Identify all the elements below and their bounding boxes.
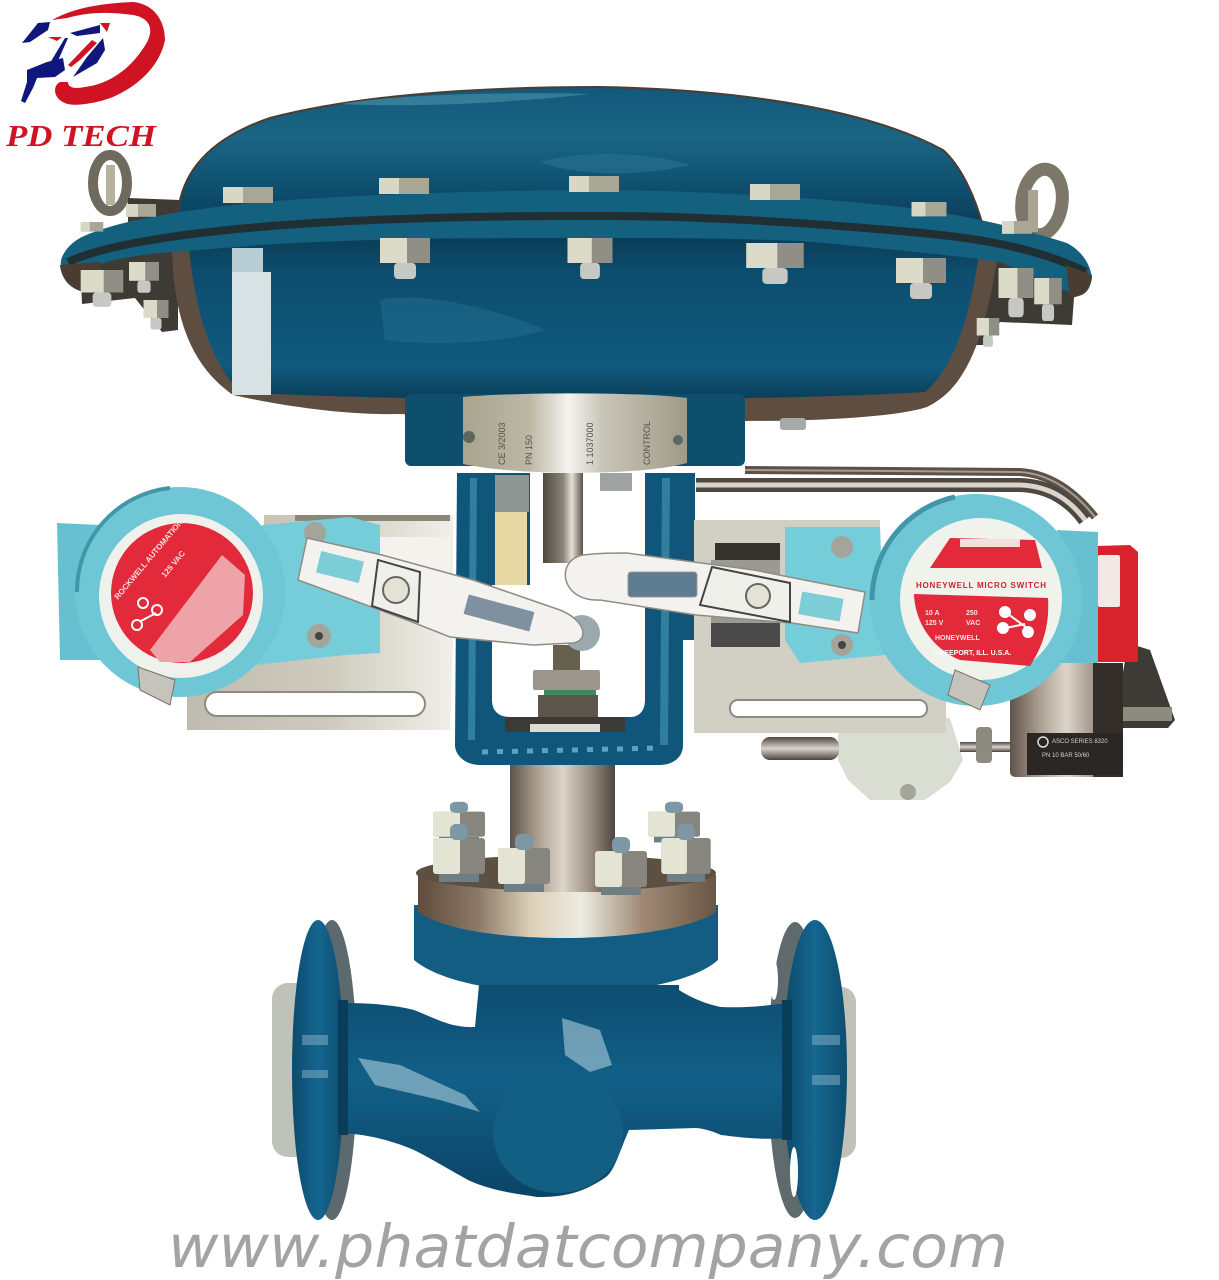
red label main: [914, 594, 1048, 666]
ring cover: [870, 494, 1082, 706]
screws: [304, 522, 331, 648]
label white stripe: [960, 539, 1020, 547]
logo wordmark: PD TECH: [5, 118, 157, 153]
label text: [925, 610, 1011, 657]
logo: PD Tech: [5, 2, 165, 153]
left mounting bracket: [187, 515, 453, 730]
yoke arms: [455, 473, 695, 765]
flange end shadows: [60, 262, 1092, 298]
logo mark: blue stylised letters: [21, 22, 105, 103]
valve body: [272, 920, 856, 1220]
right flange: [783, 920, 847, 1220]
upper dome: [178, 87, 984, 230]
steel ring side: [418, 875, 716, 938]
logo mark: red slash: [48, 23, 110, 67]
right lever arm: [565, 553, 865, 633]
plug boss: [493, 1073, 623, 1193]
lower casing highlights: [380, 297, 545, 343]
ring cover: [75, 487, 285, 697]
left switch housing: [57, 487, 380, 705]
nameplate text: CONTROL: [642, 421, 652, 465]
solenoid nameplate: [1027, 733, 1123, 775]
lifting eye left: [93, 155, 127, 211]
hex nut: [533, 670, 600, 690]
solenoid cylinder: [1010, 663, 1123, 777]
nameplate text: PN 150: [524, 435, 534, 465]
switch symbol: [132, 598, 162, 630]
actuator diaphragm casing: [60, 87, 1092, 421]
left lever arm: [298, 538, 600, 651]
right switch housing: [785, 494, 1098, 710]
solenoid nameplate: PN 10 BAR 50/60: [1042, 753, 1090, 759]
label heading: HONEYWELL MICRO SWITCH: [916, 581, 1046, 590]
steel ring top face: [416, 855, 716, 891]
label text: 250: [966, 610, 978, 617]
switch symbol: [998, 607, 1035, 637]
solenoid nameplate: ASCO SERIES 8320: [1052, 739, 1108, 745]
white face: [99, 514, 263, 678]
left flange: [292, 920, 344, 1220]
cast highlights: [302, 1018, 840, 1112]
lock washer: [505, 717, 625, 732]
flange dark stripe: [68, 216, 1086, 272]
collar casting: [405, 394, 745, 466]
red housing: [1097, 545, 1138, 662]
main body: [343, 985, 787, 1197]
nameplate text: CE 3/2003: [497, 422, 507, 465]
flange studs and nuts: [433, 802, 711, 895]
dark mounts behind flange bolts: [80, 198, 1076, 345]
ring shadow: [77, 488, 170, 592]
red label top: [930, 538, 1042, 568]
label text: 10 A: [925, 610, 940, 617]
label text: HONEYWELL: [935, 635, 980, 642]
lifting eye right: [1018, 167, 1066, 237]
white face: [900, 518, 1062, 680]
right flange face plate: [820, 987, 856, 1158]
solenoid assembly: [1010, 545, 1175, 777]
instrument tube: [696, 470, 1095, 520]
flange ring: [61, 190, 1092, 296]
red label: [111, 523, 253, 663]
cover clip: [948, 670, 990, 710]
white sleeve spacer: [232, 248, 271, 395]
conduit block: [785, 527, 885, 663]
threaded sleeve: [538, 695, 598, 722]
back plate: [57, 523, 100, 660]
valve bonnet: [414, 765, 718, 993]
label text: 125 VAC: [160, 549, 187, 579]
base speckles: [482, 748, 660, 752]
right mounting bracket: [694, 520, 946, 733]
label text: ROCKWELL AUTOMATION: [113, 518, 185, 601]
cover clip: [138, 667, 175, 705]
back plate: [1057, 530, 1098, 663]
dome highlights: [340, 93, 590, 105]
nameplate band: [463, 393, 687, 473]
flange necks: [338, 1000, 792, 1140]
scale label: [495, 475, 529, 585]
bonnet cylinder: [510, 765, 615, 892]
bolt holes: [770, 960, 798, 1197]
label text band: [150, 555, 245, 662]
bottom bolt nuts: [380, 238, 430, 279]
nameplate text: [497, 421, 652, 465]
green seal: [544, 690, 596, 695]
screws: [831, 536, 853, 656]
left flange rear rim: [307, 920, 357, 1220]
label text: VAC: [966, 620, 980, 627]
housing label: [1098, 555, 1120, 607]
label text: FREEPORT, ILL. U.S.A.: [935, 650, 1011, 657]
label text: 125 V: [925, 620, 944, 627]
lower casing: [188, 232, 982, 400]
left flange face plate: [272, 983, 312, 1157]
brown casing rim: [172, 240, 1000, 421]
logo mark: red D: [52, 2, 165, 105]
top right casing stud: [780, 418, 806, 430]
regulator body: [761, 718, 1012, 800]
arm highlights: [468, 478, 670, 745]
valve stem: [505, 473, 632, 732]
conduit block: [255, 517, 380, 665]
nameplate text: 1 1037000: [585, 422, 595, 465]
rear fitting: [1120, 643, 1175, 728]
right flange rear rim: [768, 922, 822, 1218]
top bolt heads: [223, 187, 273, 203]
blue bonnet ring: [414, 905, 718, 993]
ring shadow: [872, 497, 955, 600]
nameplate collar: [405, 393, 806, 473]
website address: www.phatdatcompany.com: [168, 1212, 1008, 1280]
